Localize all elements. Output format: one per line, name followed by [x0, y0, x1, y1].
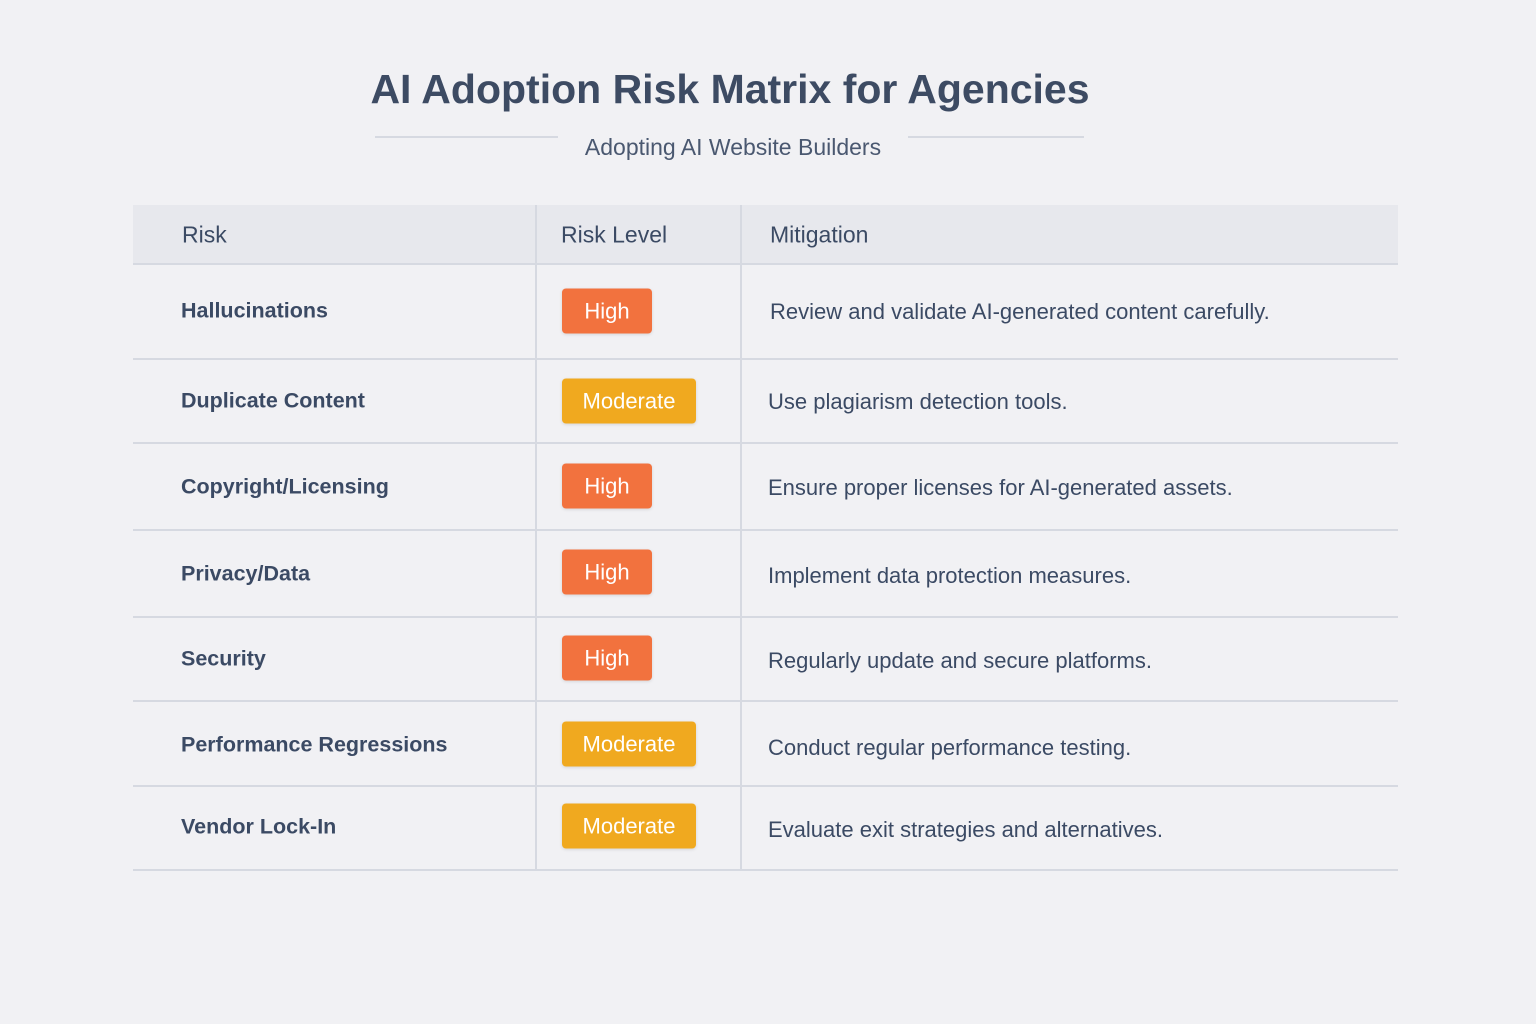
table header: Risk: [182, 222, 227, 248]
row: Copyright: Copyright/Licensing: [181, 474, 389, 498]
row: Vendor Lock-In: [181, 804, 1163, 850]
row: Performance: Performance Regressions: [181, 732, 447, 756]
subtitle: Adopting AI Website Builders: [585, 134, 881, 160]
row: Performance: Moderate: [583, 732, 675, 756]
row: Duplicate Content: Duplicate Content: [181, 388, 365, 412]
row: Performance: [181, 722, 1131, 768]
row: Security: Regularly update and secure platforms.: [768, 648, 1152, 673]
table header: Risk Level: [561, 222, 667, 248]
row: Hallucinations: [181, 288, 1270, 336]
row: Vendor Lock-In: Vendor Lock-In: [181, 814, 336, 838]
row: Privacy: Privacy/Data: [181, 562, 310, 586]
row: Security: High: [584, 646, 630, 670]
row: Security: [181, 636, 1152, 682]
row: Privacy: Implement data protection measures.: [768, 563, 1131, 588]
row: Duplicate Content: [181, 378, 1068, 426]
row: Privacy: [181, 550, 1131, 596]
row: Copyright: Ensure proper licenses for AI-generated assets.: [768, 475, 1233, 500]
row: Hallucinations: High: [584, 298, 630, 324]
row: Vendor Lock-In: Evaluate exit strategies and alternatives.: [768, 817, 1163, 842]
row: Duplicate Content: Use plagiarism detection tools.: [768, 389, 1068, 414]
table header: Mitigation: [770, 222, 868, 248]
row: Duplicate Content: Moderate: [583, 388, 675, 414]
title: AI Adoption Risk Matrix for Agencies: [370, 66, 1090, 112]
row: Vendor Lock-In: Moderate: [583, 814, 675, 838]
row: Hallucinations: Hallucinations: [181, 298, 328, 322]
row: Copyright: High: [584, 474, 630, 498]
row: Privacy: High: [584, 560, 630, 584]
table header: [133, 205, 1398, 264]
row: Security: Security: [181, 646, 266, 670]
row: Performance: Conduct regular performance testing.: [768, 735, 1131, 760]
row: Copyright: [181, 464, 1233, 510]
row: Hallucinations: Review and validate AI-generated content carefully.: [770, 299, 1270, 324]
